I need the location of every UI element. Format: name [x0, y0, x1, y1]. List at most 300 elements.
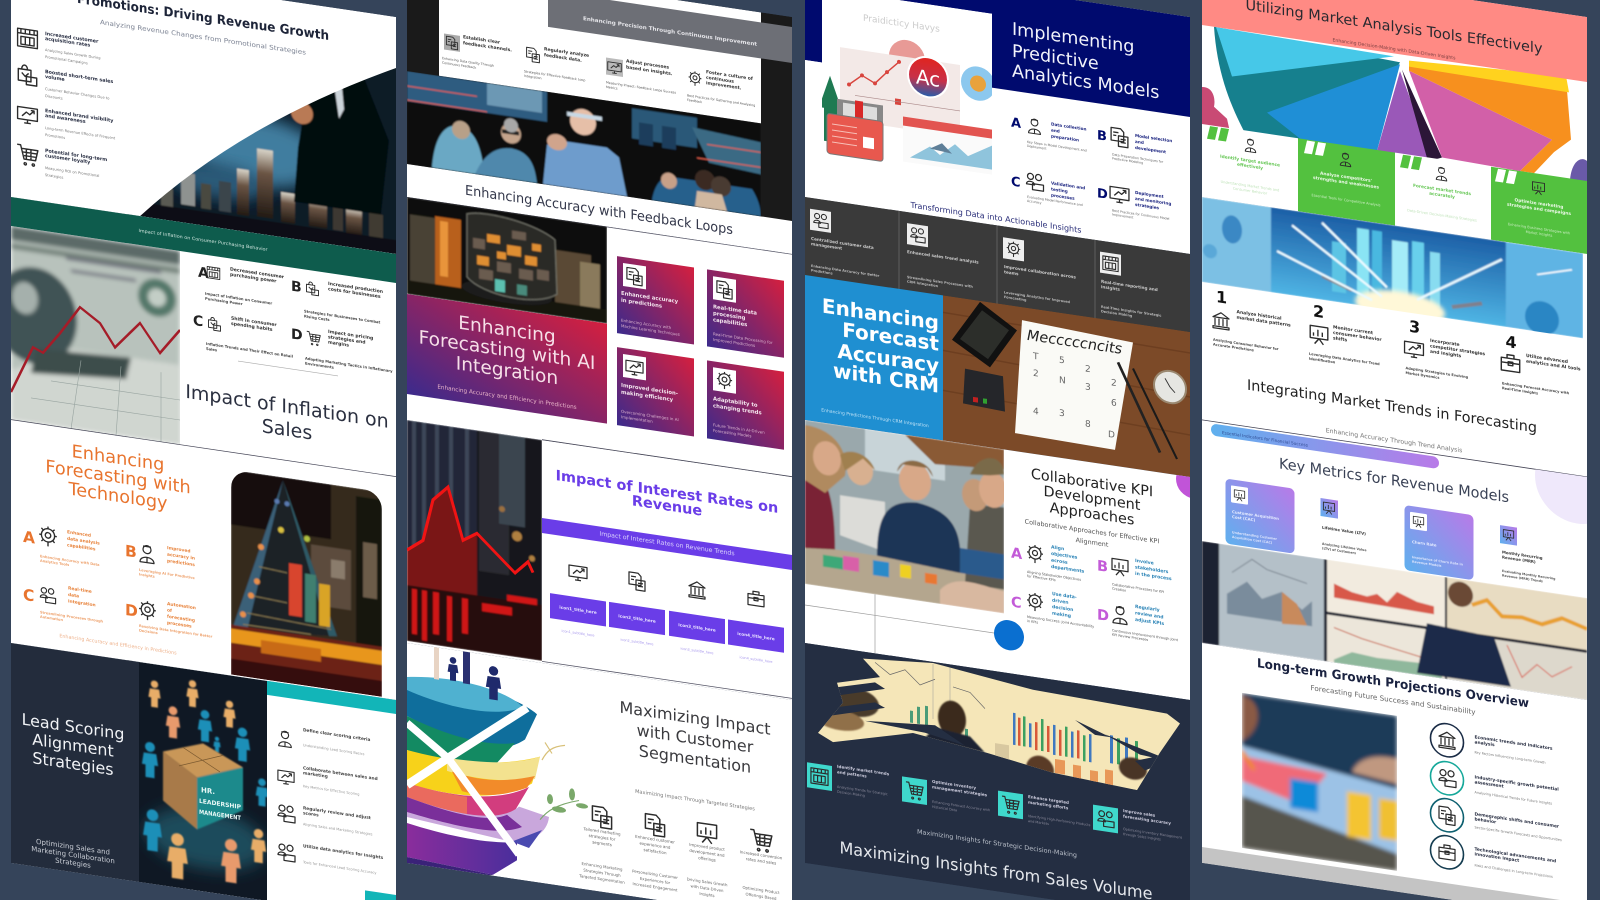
photo: hand marking chart [1242, 692, 1397, 871]
item 1: segments [592, 839, 612, 847]
item C: driven [1052, 598, 1068, 606]
item A: purchasing power [230, 272, 277, 285]
item B [126, 544, 195, 580]
item A: Enhanced [67, 529, 91, 539]
item A: objectives [1051, 551, 1078, 561]
item B: accuracy in [167, 552, 195, 562]
panel: interest rates slide [407, 419, 792, 700]
card: LTV: Analyzing Lifetime Value [1322, 542, 1367, 552]
photo: desk with notes: N [1059, 376, 1066, 387]
card: decision making: Overcoming Challenges in AI [621, 409, 679, 422]
item 3 [998, 790, 1091, 832]
item C: C [1011, 175, 1021, 191]
panel: customer segmentation slide [407, 643, 792, 900]
item C: Sales [206, 347, 218, 353]
card: churn rate: Importance of Churn Rate in [1412, 555, 1464, 567]
panel: lead scoring slide [11, 643, 396, 900]
card: MRR: Revenue (MRR) [1502, 554, 1536, 564]
footer: Enhancing Accuracy and Efficiency in Predictions [59, 633, 177, 657]
photo: desk with notes: 5 [1059, 356, 1065, 366]
item 2: consumer behavior [1333, 330, 1382, 343]
item: customer acquisition [18, 27, 101, 67]
item D: Automation [167, 601, 196, 611]
item: demographic shifts: Sector-Specific Growth Forecasts and Opportunities [1475, 825, 1562, 842]
column 1 [0, 0, 401, 900]
item C: Evaluating Model Performance and [1027, 195, 1083, 207]
item C: testing [1051, 186, 1068, 194]
item D: of [167, 607, 172, 614]
heading: Development [1044, 484, 1141, 514]
item B [292, 280, 383, 324]
item C [1011, 170, 1085, 211]
panel: market trends slide [1202, 197, 1587, 477]
item 2: icon2_title_here [618, 613, 656, 624]
item A: Key Steps in Model Development and [1027, 140, 1087, 153]
item 4: rates and sales [746, 856, 776, 866]
card 4 [1100, 252, 1161, 322]
item D: Impact on pricing [328, 329, 373, 342]
item A: for Effective KPIs [1027, 574, 1056, 582]
item: brand visibility: Enhanced brand visibility [45, 108, 114, 124]
item: data analytics: Utilize data analytics for insights [303, 843, 384, 861]
item 3: Metrics [606, 85, 618, 91]
cube [163, 737, 243, 836]
item 2: Enhancing Forecast Accuracy with [932, 800, 990, 812]
item: collaborate: marketing [303, 770, 328, 780]
item D: D [125, 601, 138, 621]
item: brand visibility [16, 106, 116, 140]
item 4 [1093, 804, 1183, 845]
item: brand visibility: and awareness [45, 113, 86, 125]
band text: Enhancing Precision Through Continuous Improvement [583, 16, 758, 48]
photo: desk with notes: 6 [1111, 398, 1117, 409]
heading: Revenue [632, 493, 702, 520]
panel: KPI slide [805, 407, 1210, 703]
item 1: Continuous Feedback [442, 61, 476, 70]
item 4 [740, 828, 783, 900]
card: real-time data: capabilities [713, 317, 747, 328]
subtitle: Collaborative Approaches for Effective KPI [1025, 518, 1159, 545]
illustration: rainbow funnel [407, 647, 588, 876]
item 3: Driving Sales Growth [687, 876, 728, 887]
item D: Environments [305, 362, 335, 370]
item 4: improvement. [706, 80, 742, 92]
panel: AI integration slide [407, 197, 792, 477]
item 3 [669, 578, 725, 657]
card 2: Streamlining Sales Processes with [907, 275, 973, 289]
band [11, 197, 396, 283]
left dark panel [11, 643, 139, 882]
item B: B [125, 542, 137, 562]
item: customer loyalty: Strategies [45, 173, 63, 180]
card: decision making [617, 347, 694, 436]
card 1: Understanding Market Trends and [1221, 180, 1279, 192]
card: CAC: Customer Acquisition [1232, 509, 1279, 521]
photo: desk with notes: 8 [1085, 419, 1091, 430]
item C: C [1011, 594, 1022, 612]
card: enhanced accuracy [617, 256, 694, 344]
photo: desk with notes: 3 [1085, 382, 1091, 393]
card 2 [907, 223, 979, 294]
item: collaborate [277, 766, 378, 796]
heading: Forecasting with [45, 456, 191, 499]
item 2: Identification [1309, 357, 1336, 365]
item 1: Enhancing Data Quality Through [442, 56, 494, 68]
card: MRR [1500, 525, 1556, 585]
card: LTV [1320, 498, 1367, 557]
item: customer loyalty: customer loyalty [45, 153, 91, 166]
photo: figures and cube: HR. [201, 785, 215, 796]
item D: review and [1135, 610, 1164, 621]
item: economic trends: Key Factors Influencing Long-term Growth [1475, 750, 1546, 765]
item 3: icon3_title_here [678, 622, 716, 633]
heading: Alignment [32, 730, 114, 761]
heading: Implementing [1012, 20, 1134, 58]
item A: capabilities [67, 542, 96, 553]
card 3 [1395, 153, 1491, 240]
item 1: feedback channels. [463, 40, 512, 54]
panel: sales volume slide [805, 640, 1190, 900]
item D: Deployment [1135, 190, 1164, 199]
subtitle: Alignment [1076, 536, 1109, 549]
photo: burst of light with bars [1202, 197, 1583, 338]
photo: jars of blocks [407, 197, 607, 324]
teal bar [267, 681, 396, 714]
panel: CRM slide [805, 197, 1190, 477]
item: customer acquisition: Increased customer [45, 31, 99, 45]
photo: desk with notes: Mecccccncits [1027, 327, 1122, 358]
illustration: analytics dashboard: Ac [916, 65, 940, 92]
photo: businessman and coin city [140, 68, 396, 254]
item D [1097, 184, 1171, 225]
item 2 [609, 569, 665, 648]
card 4: insights [1101, 284, 1120, 292]
panel: technology forecasting slide [11, 420, 396, 701]
item D: Improvement [1112, 212, 1134, 220]
item: brand visibility: Promotions [45, 133, 65, 140]
column 3 [805, 0, 1210, 900]
item 3 [687, 821, 728, 900]
item: demographic shifts: Demographic shifts and consumer [1475, 811, 1560, 830]
subtitle: Enhancing Accuracy Through Trend Analysis [1326, 427, 1462, 455]
card 3: Data-Driven Decision-Making Strategies [1407, 208, 1477, 223]
item C: Inflation Trends and Their Effect on Retail [206, 342, 293, 359]
pink corner [1176, 475, 1190, 498]
band text: Impact of Inflation on Consumer Purchasing Behavior [138, 228, 268, 253]
item A: Decreased consumer [230, 266, 285, 281]
item D: processes [167, 620, 192, 630]
item 1: Accurate Predictions [1213, 342, 1254, 352]
item A: Analytics Tools [40, 559, 69, 567]
item 3: Enhance targeted [1028, 794, 1069, 805]
column 2 [407, 0, 792, 900]
item A: Impact of Inflation on Consumer [205, 292, 272, 306]
item: regular review [277, 804, 372, 836]
card 2 [1298, 138, 1395, 226]
item C: Validation and [1051, 180, 1085, 190]
card: churn rate: Churn Rate [1412, 539, 1437, 548]
item: collaborate: Key Metrics for Effective Scoring [303, 784, 359, 797]
item: demographic shifts: behavior [1475, 816, 1497, 826]
item A: Enhancing Accuracy with Data [40, 554, 100, 567]
item C: spending habits [231, 321, 273, 333]
panel: feedback loops slide [407, 0, 792, 254]
illustration: analytics dashboard [822, 0, 992, 170]
item B: Predictive Modeling [1112, 156, 1143, 165]
item: customer acquisition: Analyzing Sales Growth During [45, 48, 101, 60]
item B: B [1097, 557, 1108, 576]
dark card row [805, 197, 1190, 333]
navy block [805, 0, 1190, 117]
card: real-time data [707, 269, 784, 358]
item 1: and patterns [837, 769, 867, 779]
card: adaptability: Forecasting Models [713, 428, 751, 438]
item B: B [1097, 128, 1107, 145]
card: MRR: Monthly Recurring [1502, 549, 1543, 560]
item 3: Incorporate [1430, 338, 1460, 348]
item 4: Foster a culture of [706, 69, 753, 82]
subtitle: Maximizing Impact Through Targeted Strategies [635, 789, 755, 813]
card 2: Analyze competitors' [1320, 170, 1372, 184]
card: CAC: Cost (CAC) [1232, 514, 1256, 523]
item 2: Experiences for [640, 876, 671, 885]
blue circle [994, 618, 1024, 652]
item D: Continuous Improvement through Joint [1112, 628, 1179, 642]
heading: with Customer [637, 721, 754, 757]
item: define criteria: Define clear scoring criteria [303, 727, 370, 743]
panel: inflation slide [0, 194, 396, 477]
item 1: Analyzing Consumer Behavior for [1213, 338, 1279, 351]
subtitle: Enhancing Decision-Making with Data-Driven Insights [1333, 37, 1456, 62]
item D: adjust KPIs [1135, 617, 1164, 627]
item D: and monitoring [1135, 196, 1171, 206]
item C: data [68, 592, 79, 600]
white X [407, 690, 527, 856]
item 1: Analyze historical [1236, 309, 1282, 322]
item 3: 3 [1409, 317, 1420, 337]
item B: Rising Costs [304, 314, 330, 322]
item 1 [442, 31, 512, 75]
subtitle: Optimizing Sales and [36, 837, 110, 857]
card: decision making: making efficiency [621, 390, 674, 403]
item B: Strategies for Businesses to Combat [304, 309, 381, 325]
card 4: Market Insights [1526, 230, 1553, 238]
item: short-term sales: Customer Behavior Changes Due to [45, 87, 110, 101]
item: technological advancements [1430, 833, 1556, 885]
panel: growth projections slide [1202, 643, 1587, 900]
card: MRR: Evaluating Monthly Recurring [1502, 569, 1556, 581]
heading: Collaborative KPI [1031, 466, 1153, 501]
item C: Real-time [68, 585, 92, 595]
item: industry growth: assessment [1475, 779, 1504, 790]
item: demographic shifts [1430, 796, 1562, 849]
card 3: Forecasting [1004, 295, 1027, 302]
pill text: Essential Indicators for Financial Success [1222, 430, 1308, 448]
gradient title panel [407, 294, 607, 424]
photo: analyst facing dashboards [1202, 541, 1587, 700]
subtitle: Analyzing Revenue Changes from Promotional Strategies [100, 18, 307, 57]
item B: in the process [1135, 571, 1172, 582]
heading: Enhancing [822, 294, 939, 335]
card 1 [1202, 124, 1298, 211]
item: industry growth: Industry-specific growth potential [1475, 774, 1559, 793]
item A: Data collection [1051, 121, 1087, 132]
pill [1211, 423, 1439, 469]
item C [24, 586, 103, 623]
item: data analytics [277, 844, 383, 874]
item: regular review: Aligning Sales and Marketing Strategies [303, 822, 373, 837]
item D: D [1097, 186, 1108, 203]
item B: Creation [1112, 587, 1126, 593]
item 4: Feedback [687, 98, 702, 104]
card 3 [1003, 237, 1076, 310]
item: collaborate: Collaborate between sales and [303, 765, 378, 782]
item A: across [1051, 557, 1068, 566]
item 2 [902, 774, 990, 817]
item C: in KPIs [1027, 619, 1038, 625]
photo: desk with notes: D [1108, 430, 1115, 441]
item 4: Improve sales [1123, 808, 1156, 818]
item 1: icon1_title_here [559, 605, 597, 615]
item D: Resolving Data Integration for Better [139, 624, 213, 639]
heading: Lead Scoring [22, 710, 124, 744]
card 4: Enhancing Business Strategies with [1508, 222, 1570, 235]
item 1 [1213, 287, 1291, 358]
item 2 [524, 43, 589, 87]
photo: desk with notes: 4 [1033, 407, 1039, 418]
item: customer acquisition: Promotional Campaigns [45, 55, 88, 65]
column 4 [1202, 0, 1600, 900]
item B: stakeholders [1135, 564, 1169, 575]
item: short-term sales: Discounts [45, 94, 63, 101]
item C: Use data- [1052, 591, 1077, 601]
item 1: Identify market trends [837, 764, 890, 777]
item A: A [1011, 545, 1023, 563]
item C [194, 315, 293, 358]
item 4: Optimizing Product [742, 885, 780, 895]
card 4: Optimize marketing [1515, 197, 1563, 210]
item D: KPI Review Processes [1112, 633, 1148, 642]
item: economic trends: analysis [1475, 739, 1495, 748]
photo: desk with notes: 3 [1059, 409, 1065, 419]
item D: strategies and [328, 334, 366, 346]
item 2: experience and [640, 840, 671, 850]
item D: Regularly [1135, 604, 1160, 613]
item D [1097, 598, 1179, 646]
item 2 [1309, 301, 1382, 371]
item B: Improved [167, 545, 190, 555]
card 2: Enhanced sales trend analysis [907, 249, 979, 265]
card 4: Real-time reporting and [1101, 279, 1158, 292]
subtitle: Maximizing Insights for Strategic Decision-Making [917, 829, 1077, 859]
card: real-time data: Real-time data [713, 304, 757, 317]
item 4: icon4_title_here [737, 631, 775, 641]
item 1: Decision-Making [837, 790, 865, 798]
item 4: Utilize advanced [1526, 353, 1568, 365]
heading: Strategies [32, 748, 114, 779]
item 3: Insights [699, 891, 715, 898]
item C: C [193, 313, 203, 330]
card: CAC: Acquisition Cost (CAC) [1232, 535, 1273, 545]
item D [126, 601, 212, 638]
item 3 [606, 55, 676, 99]
item C: integration [68, 598, 96, 609]
item 4: icon4_subtitle_here [740, 655, 772, 664]
card: adaptability [707, 360, 784, 450]
subtitle: Enhancing Predictions Through CRM Integration [821, 407, 929, 429]
heading: Key Metrics for Revenue Models [1279, 454, 1509, 506]
item B: costs for businesses [328, 286, 381, 300]
heading: Enhancing [458, 313, 556, 348]
subtitle: Enhancing Accuracy and Efficiency in Predictions [437, 385, 577, 411]
item B: B [291, 279, 302, 296]
heading: Integration [456, 353, 558, 389]
item 3 [1405, 316, 1485, 387]
item: economic trends: Economic trends and indicators [1475, 734, 1553, 752]
item 2: feedback data. [544, 52, 582, 64]
item D: Decisions [139, 628, 158, 635]
bottom strip [1202, 847, 1587, 900]
photo: desk with notes: 2 [1033, 369, 1039, 380]
item 3: development and [689, 848, 725, 858]
item A: Aligning Stakeholder Objectives [1027, 570, 1081, 582]
photo: pyramid [231, 470, 382, 699]
illustration: 3D pie chart [1202, 22, 1587, 192]
item A: preparation [1051, 133, 1079, 143]
card: CAC: Understanding Customer [1232, 530, 1277, 541]
item: define criteria [278, 728, 370, 756]
item 3: and insights [1430, 349, 1461, 359]
heading: Predictive [1012, 42, 1099, 74]
item: short-term sales: volume [45, 74, 65, 83]
item: short-term sales [18, 64, 113, 100]
item A: Align [1051, 544, 1064, 552]
item 2: Leveraging Data Analytics for Trend [1309, 352, 1380, 366]
item 4: continuous [706, 75, 734, 85]
item A: A [198, 265, 209, 282]
item 3: based on insights. [626, 64, 673, 77]
card: adaptability: Adaptability to [713, 396, 758, 409]
photo: desk with notes: 2 [1111, 378, 1117, 389]
item 1: Establish clear [463, 34, 501, 46]
illustration: analytics dashboard: Praidicticy Havys [863, 14, 940, 35]
item 2: Increased Engagement [633, 881, 678, 893]
card 3: accurately [1429, 191, 1455, 200]
heading: Maximizing Impact [619, 698, 771, 739]
card 1: management [811, 241, 842, 251]
item C: Shift in consumer [231, 316, 277, 328]
item 2: icon2_subtitle_here [621, 638, 653, 646]
item C: Measuring Success: Joint Accountability [1027, 615, 1094, 629]
photo: desk with notes [943, 296, 1190, 477]
item D: D [291, 327, 303, 344]
item C: Streamlining Processes through [40, 610, 104, 624]
item A: Deployment [1027, 144, 1047, 151]
item B: Model selection [1135, 133, 1172, 143]
card: adaptability: Future Trends in AI-Driven [713, 422, 765, 435]
item A: Purchasing Power [205, 297, 243, 306]
item 3: marketing efforts [1028, 800, 1069, 811]
item D: strategies [1135, 202, 1160, 210]
card 3: teams [1004, 269, 1019, 276]
item 1: strategies for [589, 833, 616, 842]
item: customer loyalty [17, 144, 107, 179]
card: LTV: (LTV) of Customers [1322, 546, 1356, 555]
panel: promotions slide [11, 0, 401, 261]
item 2: Personalizing Customer [632, 868, 678, 880]
item 2: Monitor current [1333, 324, 1374, 336]
photo: torn-edge charts [805, 640, 1190, 807]
